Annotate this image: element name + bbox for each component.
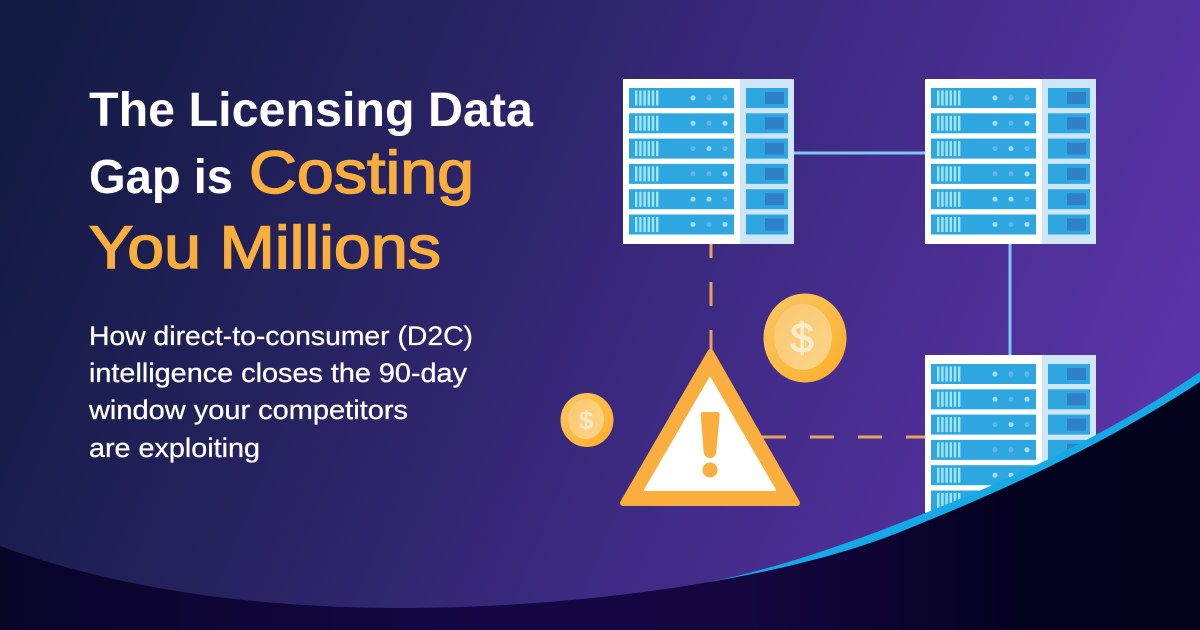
icon: large dollar coin: $ — [790, 314, 814, 361]
status lights — [992, 372, 1030, 478]
subtitle: intelligence closes the 90-day — [89, 358, 468, 388]
title — [89, 84, 533, 281]
status lights — [690, 96, 728, 227]
subtitle: window your competitors — [88, 395, 408, 425]
title: You Millions — [89, 214, 441, 281]
server rack: top left — [623, 79, 794, 244]
dashed connector: server 1 to warning — [710, 244, 712, 354]
connector: server 2 to server 3 — [1008, 244, 1012, 355]
subtitle — [88, 321, 473, 463]
title: Gap is — [89, 151, 233, 204]
title: Costing — [249, 139, 474, 206]
server rack: top right — [925, 79, 1096, 244]
subtitle: are exploiting — [89, 433, 260, 463]
connector: server 1 to server 2 — [794, 152, 925, 154]
curve: dark bottom band — [0, 382, 1200, 630]
curve: blue accent band — [655, 372, 1200, 630]
server rack: bottom right, partly hidden by the curve — [925, 355, 1096, 520]
icon: small dollar coin — [560, 393, 614, 447]
icon: large dollar coin — [764, 294, 846, 382]
icon: small dollar coin: $ — [579, 407, 593, 435]
title: The Licensing Data — [89, 84, 533, 137]
icon: warning triangle — [623, 352, 797, 503]
status lights — [992, 96, 1030, 227]
dashed connector: warning to server 3 — [762, 436, 925, 438]
subtitle: How direct-to-consumer (D2C) — [89, 321, 473, 351]
